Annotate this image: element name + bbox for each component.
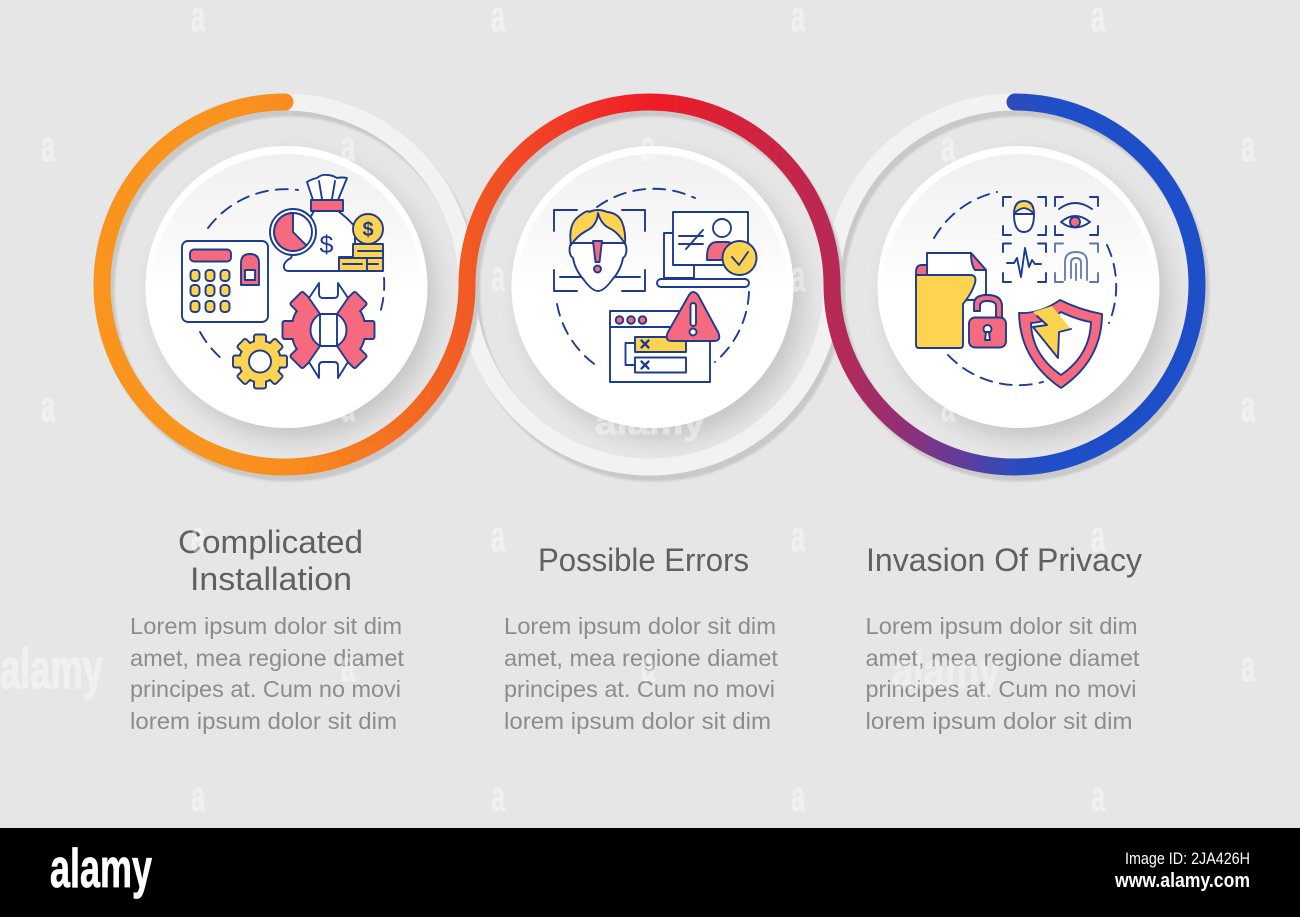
watermark pattern: a	[41, 382, 55, 431]
text block: complicated installation: principes at. Cum no movi	[130, 676, 401, 702]
watermark pattern: a	[641, 122, 655, 171]
heading: possible errors: Possible Errors	[538, 542, 749, 578]
label: dollar on bag: $	[320, 231, 334, 259]
icon: face scan	[554, 210, 645, 291]
watermark pattern: a	[491, 772, 505, 821]
text block: possible errors: amet, mea regione diamet	[504, 645, 778, 671]
heading: complicated installation	[178, 524, 363, 597]
text block: invasion of privacy: amet, mea regione diamet	[866, 645, 1140, 671]
icon: money bag with clock and coins	[270, 175, 383, 271]
panel: invasion of privacy disc	[878, 146, 1168, 439]
text block: complicated installation	[130, 613, 404, 734]
watermark pattern: a	[191, 512, 205, 561]
icon: complicated installation	[182, 175, 384, 388]
watermark pattern: a	[791, 512, 805, 561]
watermark pattern: a	[341, 382, 355, 431]
text block: complicated installation: Lorem ipsum dolor sit dim	[130, 613, 402, 639]
icon: broken shield	[1019, 300, 1102, 388]
watermark pattern: alamy	[892, 642, 1000, 700]
icon: keypad	[182, 241, 268, 322]
text block: invasion of privacy: principes at. Cum no movi	[866, 676, 1136, 702]
icon: gear with wrench	[282, 280, 374, 380]
text block: possible errors	[504, 613, 778, 734]
heading: invasion of privacy: Invasion Of Privacy	[866, 542, 1142, 578]
icon: biometric frames	[1003, 197, 1098, 282]
icon: possible errors	[554, 189, 756, 382]
footer logo: alamy	[50, 837, 152, 899]
label: dollar on coin: $	[362, 219, 374, 241]
text block: complicated installation: amet, mea regione diamet	[130, 645, 404, 671]
watermark pattern: a	[191, 772, 205, 821]
text block: possible errors: Lorem ipsum dolor sit dim	[504, 613, 776, 639]
icon: laptop with mismatch	[657, 212, 756, 287]
watermark pattern: a	[1091, 512, 1105, 561]
heading: complicated installation: Installation	[190, 561, 352, 597]
watermark pattern: a	[791, 772, 805, 821]
text block: complicated installation: lorem ipsum dolor sit dim	[130, 708, 397, 734]
watermark pattern: a	[341, 122, 355, 171]
panel: complicated installation disc	[146, 146, 436, 439]
watermark pattern: a	[641, 642, 655, 691]
panel: possible errors disc	[512, 146, 802, 439]
light ribbon with shadow	[285, 102, 1019, 473]
icon: folder and document	[916, 253, 986, 348]
watermark pattern: a	[791, 252, 805, 301]
icon: invasion of privacy	[916, 192, 1116, 388]
watermark pattern: a	[941, 122, 955, 171]
text block: invasion of privacy: lorem ipsum dolor sit dim	[866, 708, 1132, 734]
watermark pattern: a	[41, 122, 55, 171]
coloured ribbon with shadow	[102, 102, 1201, 473]
text block: invasion of privacy: Lorem ipsum dolor sit dim	[866, 613, 1138, 639]
icon: open padlock	[969, 295, 1006, 348]
watermark pattern: a	[341, 642, 355, 691]
watermark pattern: a	[1241, 122, 1255, 171]
watermark pattern: a	[941, 382, 955, 431]
text block: possible errors: principes at. Cum no movi	[504, 676, 775, 702]
watermark pattern: alamy	[0, 637, 103, 700]
text block: possible errors: lorem ipsum dolor sit dim	[504, 708, 771, 734]
watermark pattern: alamy	[595, 404, 705, 442]
watermark pattern: a	[1241, 382, 1255, 431]
icon: small gear	[233, 334, 287, 388]
watermark pattern: a	[1091, 772, 1105, 821]
watermark pattern: a	[491, 252, 505, 301]
heading: complicated installation: Complicated	[178, 524, 363, 560]
watermark pattern: a	[1241, 642, 1255, 691]
watermark pattern: a	[491, 512, 505, 561]
website: www.alamy.com	[1114, 870, 1250, 892]
text block: invasion of privacy	[866, 613, 1140, 734]
icon: error window with warning	[610, 292, 719, 382]
footer bar	[0, 828, 1300, 917]
image id: Image ID: 2JA426H	[1125, 849, 1250, 868]
